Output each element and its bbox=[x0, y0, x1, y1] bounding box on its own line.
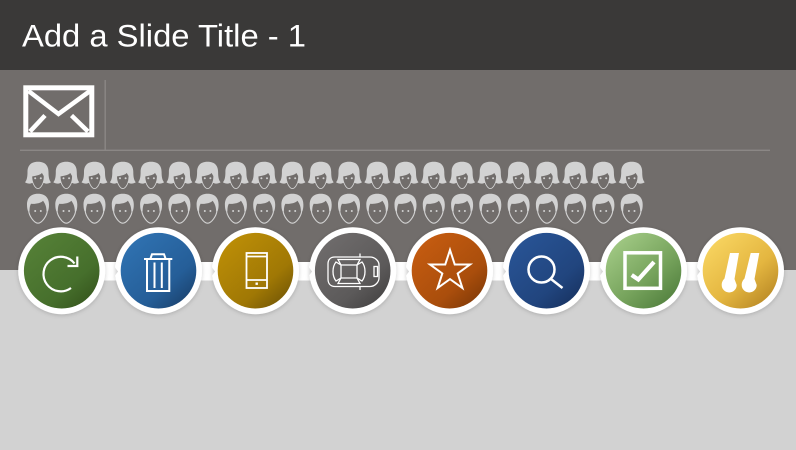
pictogram row: men bbox=[27, 194, 643, 223]
background panel: lower light grey bbox=[0, 270, 796, 450]
icon: checked box bbox=[625, 253, 660, 288]
step 1: refresh bbox=[18, 227, 105, 314]
step 2: trash bbox=[115, 227, 202, 314]
connector chevrons bbox=[112, 264, 700, 279]
pictogram row: women bbox=[25, 162, 645, 189]
icon: refresh arrow bbox=[43, 256, 77, 291]
title: Add a Slide Title - 1 bbox=[22, 18, 306, 54]
icon: star bbox=[430, 250, 470, 288]
connector band bbox=[62, 262, 740, 280]
horizontal divider bbox=[20, 150, 770, 151]
icon: magnifier bbox=[528, 256, 562, 288]
icon: envelope bbox=[26, 88, 92, 135]
step 3: phone bbox=[212, 227, 299, 314]
title bar bbox=[0, 0, 796, 70]
icon: quotation marks bbox=[722, 253, 759, 293]
icon: smartphone bbox=[246, 253, 267, 288]
vertical divider bbox=[104, 80, 106, 150]
step 6: search bbox=[503, 227, 590, 314]
step 8: quote bbox=[697, 227, 784, 314]
step 7: checkbox bbox=[600, 227, 687, 314]
background panel: upper grey bbox=[0, 70, 796, 270]
icon: car top view bbox=[328, 254, 379, 290]
icon: trash can bbox=[144, 254, 172, 291]
step 4: car bbox=[309, 227, 396, 314]
step 5: star bbox=[406, 227, 493, 314]
